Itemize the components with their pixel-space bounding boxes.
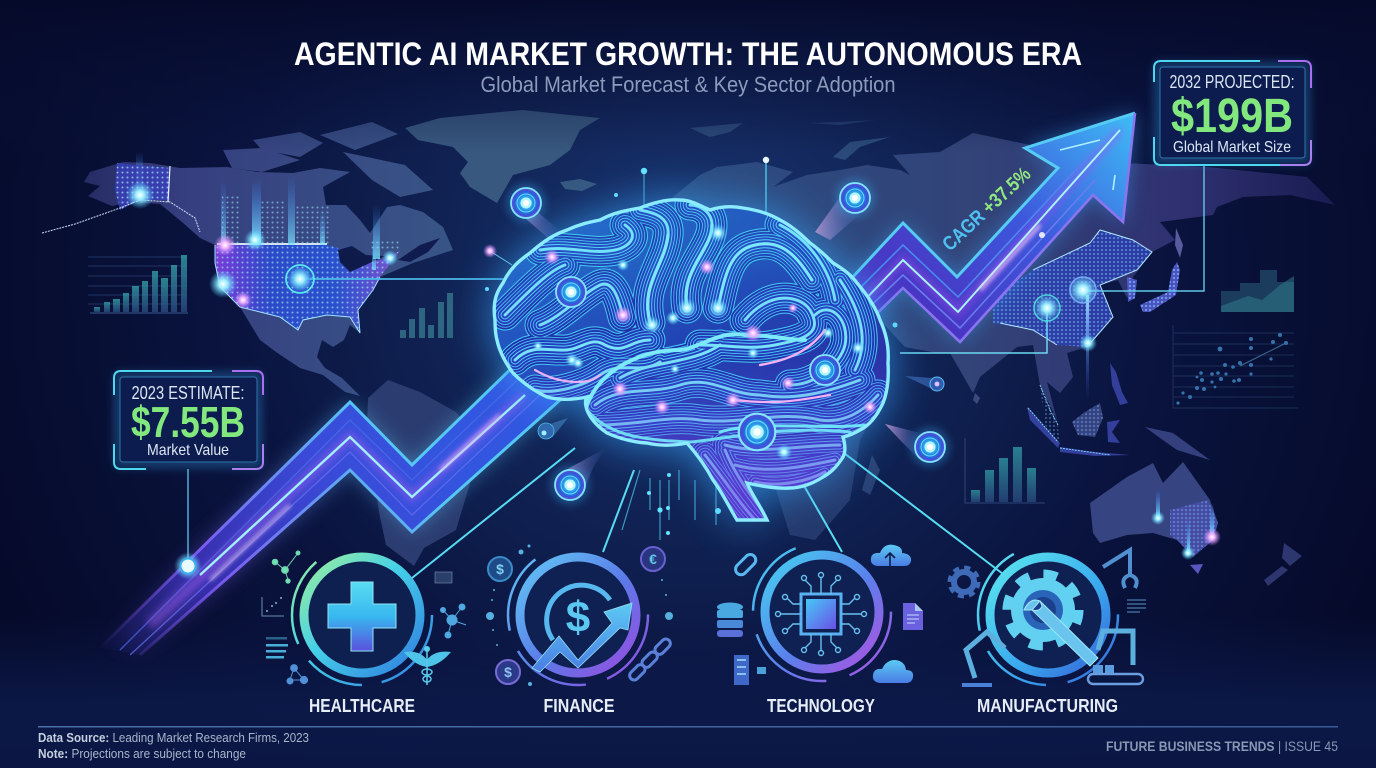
icon part: molecule network top [272, 551, 300, 583]
subtitle: Global Market Forecast & Key Sector Adoption [480, 72, 896, 97]
map: Tasmania [1190, 564, 1203, 574]
icon part: coin bottom left [496, 660, 520, 684]
map: Madagascar [862, 455, 880, 495]
brain: embedded orbs [556, 277, 586, 307]
chart: left bar chart [88, 255, 188, 313]
map: USA dotted highlight [215, 244, 400, 333]
icon part: coin top right [641, 547, 665, 571]
icon part: molecule right [440, 604, 466, 638]
sphere: upper left [506, 183, 562, 238]
icon: manufacturing [950, 545, 1146, 685]
world map [42, 110, 1335, 586]
brain: folded contour texture [490, 195, 890, 525]
map: Novaya Zemlya [833, 137, 890, 160]
circuit nodes around brain [485, 157, 898, 535]
map: US upper dot columns [222, 195, 400, 250]
map: Borneo [1072, 403, 1103, 437]
icon part: dollar sign: $ [566, 593, 590, 642]
brain: outer rim [494, 200, 888, 520]
icon part: coin top left [488, 557, 512, 581]
map: Newfoundland gulf [398, 238, 440, 262]
brain glow [494, 200, 888, 520]
map: Siberian islands [808, 120, 875, 125]
map glow: US coastal points [126, 181, 398, 309]
map: Africa [630, 240, 885, 540]
title: AGENTIC AI MARKET GROWTH: THE AUTONOMOUS ERA [294, 36, 1082, 72]
sphere: upper right [815, 178, 875, 240]
icon part: upper robot arm [1103, 550, 1137, 588]
map: Indonesia and Philippines dotted islands [1027, 363, 1130, 456]
icon: finance [486, 544, 673, 686]
map: Great Lakes [338, 246, 385, 272]
icon part: rising zigzag arrow [532, 603, 632, 672]
sphere: small right comet [905, 376, 944, 391]
chart: right scatter plot [1173, 325, 1298, 408]
map: Sri Lanka [973, 393, 980, 404]
callout text: year: 2023 ESTIMATE: [132, 383, 244, 403]
icon part: chain links [628, 637, 672, 682]
connector: US node to brain [300, 278, 520, 280]
callout text: caption: Global Market Size [1173, 139, 1291, 156]
icon part: circuit traces [776, 572, 866, 656]
icon part: mini bars [266, 637, 288, 658]
brain: bright sulci [535, 225, 865, 442]
icon part: database [717, 602, 743, 637]
chart: equalizer bars [400, 293, 453, 338]
callout text: value: $199B [1171, 90, 1293, 143]
arrow label: CAGR: CAGR +37.5% [938, 163, 1035, 256]
footer: data source: Data Source: Leading Market Research Firms, 2023 [38, 731, 309, 745]
map pin: South China node [1034, 295, 1097, 352]
label: manufacturing: MANUFACTURING [977, 696, 1118, 716]
icon part: medical cross [328, 582, 396, 651]
icon part: dotted orbit [486, 544, 673, 686]
icon part: coin top right: € [649, 551, 657, 567]
map: Iceland [560, 179, 597, 191]
map: New Zealand [1264, 543, 1302, 586]
connector: China node to India line [900, 308, 1047, 353]
map: Arctic islands [223, 122, 433, 197]
icon part: molecule bottom [287, 665, 308, 684]
callout text: caption: Market Value [147, 442, 229, 459]
map: Australia dotted highlight [1151, 490, 1221, 560]
chart: lower bar chart [965, 438, 1045, 503]
icon part: coin bottom left: $ [504, 664, 512, 680]
sphere: small left comet [538, 418, 568, 439]
icon part: caduceus [404, 646, 451, 685]
icon part: mini document [435, 572, 452, 583]
icon part: document [903, 603, 923, 630]
map pin: Shanghai node [1068, 275, 1098, 400]
map: South America [366, 380, 480, 566]
connector: 2032 callout to China node [1083, 165, 1204, 291]
callout: 2032 projected [1153, 61, 1311, 165]
map: China dotted highlight [993, 228, 1183, 347]
icon: healthcare [262, 545, 466, 685]
callout text: year: 2032 PROJECTED: [1170, 72, 1294, 92]
icon part: right robot arm and conveyor [1088, 631, 1143, 684]
icon: technology [717, 543, 923, 685]
icon part: processor chip [801, 594, 841, 634]
callout text: value: $7.55B [131, 398, 245, 447]
connector: 2023 callout to arrow start [174, 469, 202, 580]
label: technology: TECHNOLOGY [767, 696, 875, 716]
footer rule [38, 726, 1338, 728]
icon part: cloud upload [871, 545, 911, 572]
footer: publication credit: FUTURE BUSINESS TRENDS | ISSUE 45 [1106, 739, 1338, 754]
map: Europe and Asia [620, 133, 1335, 420]
map: Australia [1090, 462, 1218, 557]
map: Greenland [405, 110, 600, 203]
map pin: USA centre node [286, 265, 314, 293]
map: Svalbard [690, 123, 743, 137]
icon part: coin top left: $ [496, 561, 504, 577]
icon part: mini scatter [262, 597, 284, 616]
orbiting data spheres [483, 178, 950, 505]
icon part: cloud [873, 660, 913, 683]
map: Japan and Korea [1127, 262, 1180, 312]
sphere: lower right [885, 424, 950, 467]
sphere: lower left [550, 448, 606, 505]
map: US light beams [136, 152, 380, 270]
map: New Guinea [1145, 427, 1210, 460]
icon part: chain link [733, 552, 758, 577]
icon part: wrench [1024, 600, 1098, 666]
label: finance: FINANCE [544, 696, 614, 716]
connector lines: brain to sector icons [412, 160, 1003, 578]
icon part: server panel [734, 655, 766, 685]
map: North America [84, 162, 453, 396]
growth arrow: upper segment and head [850, 113, 1135, 342]
icon part: left robot arm [962, 632, 1005, 685]
icon part: large gear [1007, 574, 1079, 646]
node: pink left [483, 244, 512, 265]
callout: 2023 estimate [113, 371, 263, 469]
footer: note: Note: Projections are subject to change [38, 747, 246, 761]
brain: synapse glow points [533, 224, 877, 460]
map: Alaska highlight [42, 163, 200, 233]
brain [490, 195, 890, 525]
chart: right area chart [1221, 270, 1294, 312]
map: Sakhalin [1175, 228, 1183, 258]
growth arrow: lower segment [100, 360, 560, 655]
icon part: mini panel [1127, 600, 1146, 612]
icon part: small gear [950, 568, 978, 596]
label: healthcare: HEALTHCARE [309, 696, 415, 716]
